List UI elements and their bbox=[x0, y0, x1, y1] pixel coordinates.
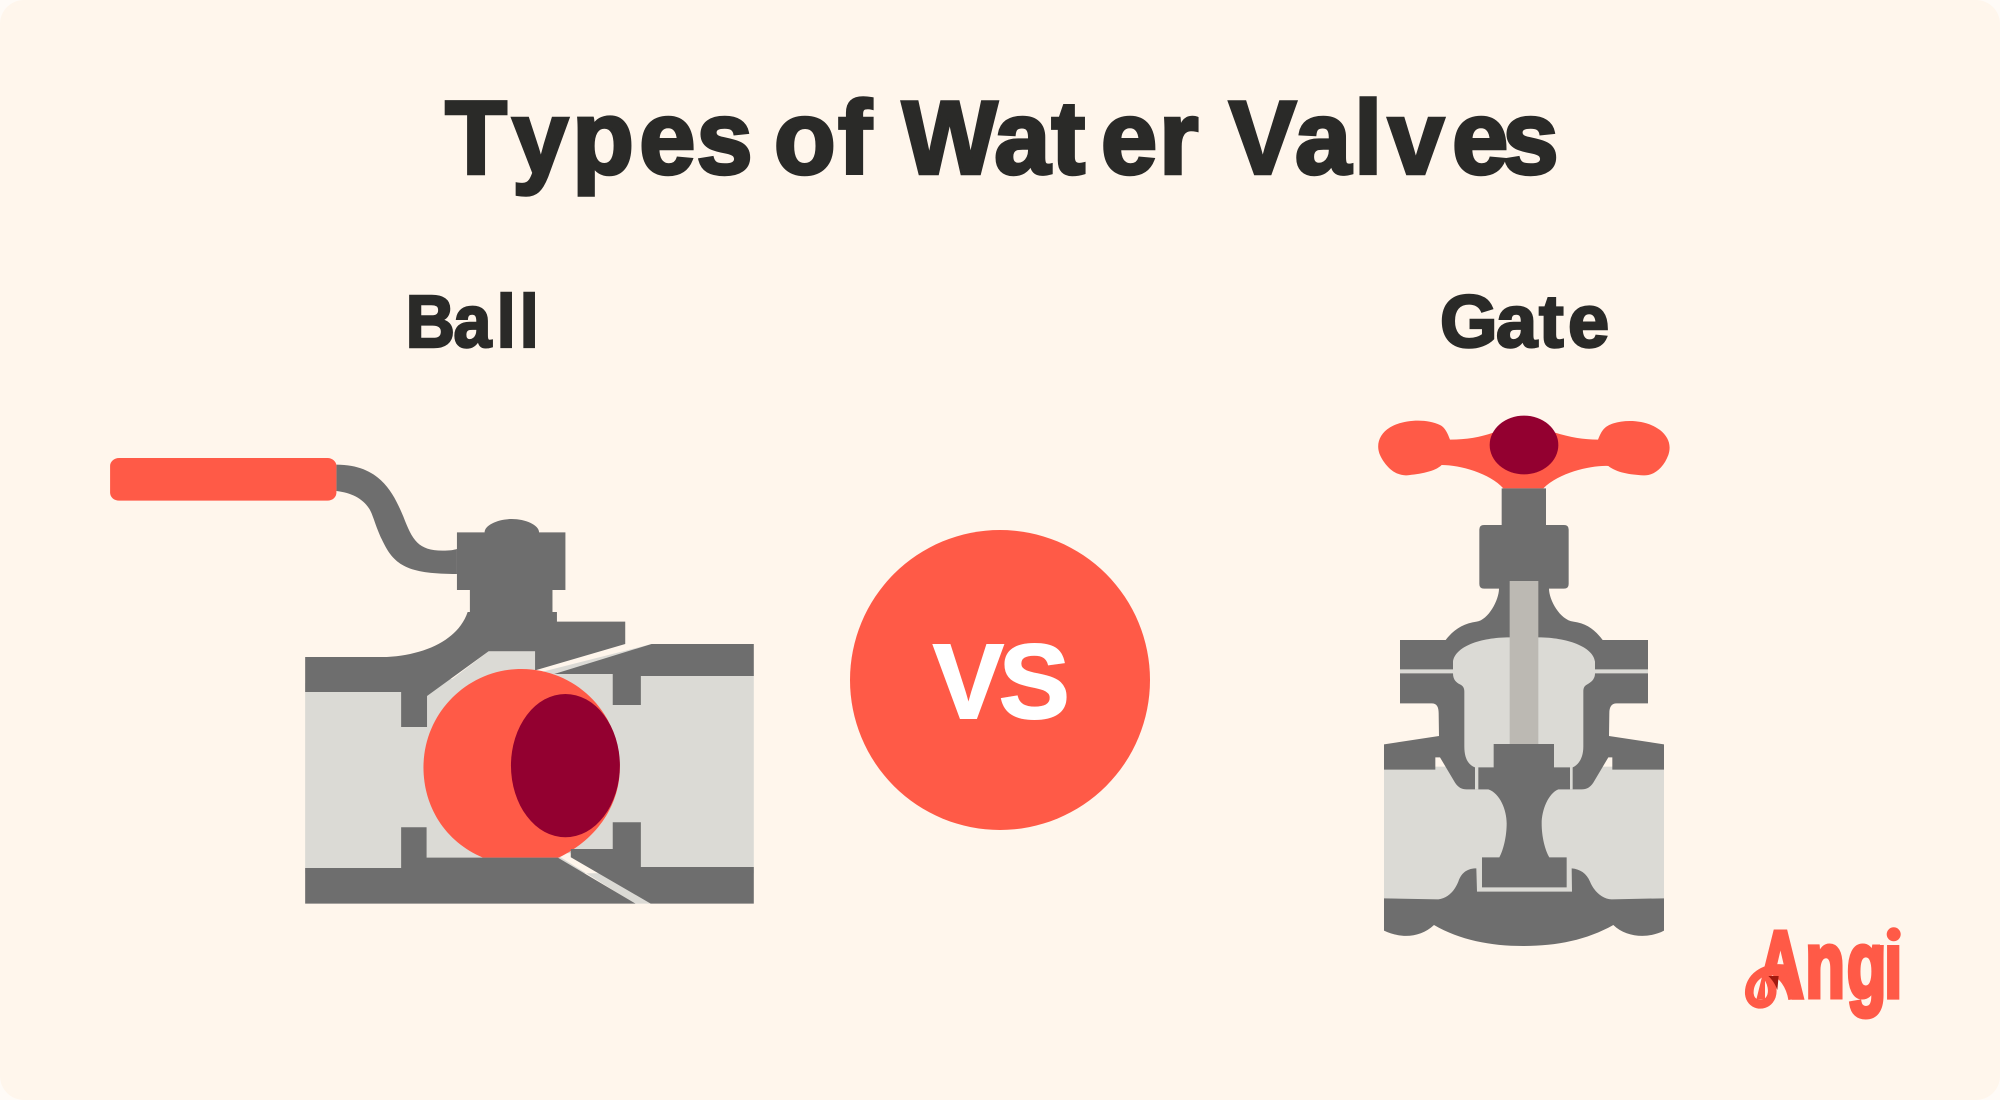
ball valve lower right wall bbox=[571, 822, 754, 904]
heading: ball: Ball bbox=[406, 281, 539, 364]
logo swash bbox=[1749, 967, 1793, 1004]
gate valve handwheel hub bbox=[1490, 416, 1558, 474]
ball valve lever arm bbox=[336, 465, 457, 574]
vs badge bbox=[850, 530, 1150, 830]
gate valve base bbox=[1384, 868, 1664, 946]
gate valve illustration bbox=[1378, 416, 1670, 946]
ball valve bonnet and upper body bbox=[305, 519, 625, 727]
ball valve water chamber bbox=[305, 644, 754, 904]
gate valve gate disc bbox=[1478, 744, 1570, 887]
ball valve upper right pipe wall bbox=[554, 644, 754, 705]
vs label: VS bbox=[933, 623, 1070, 741]
gate valve body and bonnet bbox=[1384, 488, 1664, 789]
angi logo bbox=[1749, 912, 1906, 1018]
gate valve stem bbox=[1510, 581, 1538, 746]
ball valve red handle grip bbox=[110, 458, 336, 501]
ball valve lower left wall bbox=[305, 827, 636, 904]
gate valve handwheel bbox=[1378, 421, 1670, 488]
vs circle bbox=[850, 530, 1150, 830]
gate valve flange gaps bbox=[1400, 669, 1648, 673]
heading: gate: Gate bbox=[1440, 280, 1609, 363]
logo i dot bbox=[1880, 918, 1906, 945]
gate valve pipe water bbox=[1384, 767, 1664, 900]
gate valve inner chamber bbox=[1453, 637, 1595, 789]
ball valve ball bbox=[423, 669, 620, 858]
ball valve ball opening bbox=[511, 694, 620, 837]
title: Types of Water Valves bbox=[445, 79, 1559, 196]
logo wordmark: Angi bbox=[1757, 912, 1902, 1018]
ball valve illustration bbox=[110, 458, 754, 904]
